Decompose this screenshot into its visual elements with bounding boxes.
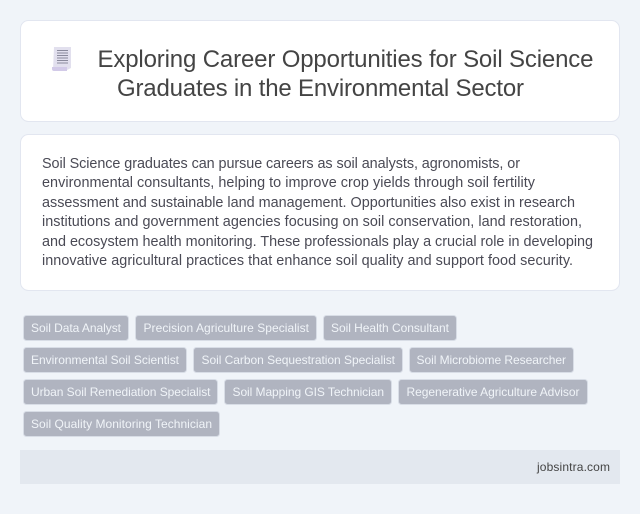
tag: Soil Health Consultant: Soil Health Consultant: [331, 321, 450, 335]
footer source text: jobsintra.com: [536, 460, 610, 474]
tag: Soil Quality Monitoring Technician: [24, 412, 220, 436]
tag: Urban Soil Remediation Specialist: [24, 380, 218, 404]
tag: Precision Agriculture Specialist: [136, 316, 316, 340]
tag: Soil Health Consultant: [324, 316, 456, 340]
tag: Soil Mapping GIS Technician: [224, 380, 392, 404]
tag: Soil Carbon Sequestration Specialist: Soil Carbon Sequestration Specialist: [202, 353, 396, 367]
tag: Soil Microbiome Researcher: [410, 348, 574, 372]
tag: Regenerative Agriculture Advisor: [398, 380, 588, 404]
heading: [98, 46, 594, 102]
tag: Environmental Soil Scientist: Environmental Soil Scientist: [31, 353, 180, 367]
tag: Precision Agriculture Specialist: Precision Agriculture Specialist: [144, 321, 310, 335]
tag: Soil Data Analyst: Soil Data Analyst: [31, 321, 122, 335]
text block: description: innovative agricultural practices that enhance soil quality and support food security.: [42, 253, 573, 269]
tag: Soil Data Analyst: [24, 316, 128, 340]
tag: Soil Mapping GIS Technician: Soil Mapping GIS Technician: [232, 385, 384, 399]
panel: description card: [20, 134, 620, 290]
tag: Soil Quality Monitoring Technician: Soil Quality Monitoring Technician: [31, 417, 212, 431]
tag list: [24, 316, 588, 436]
tag: Soil Microbiome Researcher: Soil Microbiome Researcher: [416, 353, 566, 367]
text block: description: environmental consultants, helping to improve crop yields through soil fertility: [42, 175, 536, 191]
tag: Environmental Soil Scientist: [24, 348, 186, 372]
text block: description: [42, 156, 593, 269]
text block: description: Soil Science graduates can pursue careers as soil analysts, agronomists, or: [42, 156, 520, 172]
text block: description: assessment and sustainable land management. Opportunities also exist in research: [42, 195, 575, 211]
tag: Regenerative Agriculture Advisor: Regenerative Agriculture Advisor: [406, 385, 580, 399]
text block: description: institutions and government agencies focusing on soil conservation, land restoration,: [42, 214, 582, 230]
panel: title card: [20, 20, 620, 122]
tag: Soil Carbon Sequestration Specialist: [194, 348, 402, 372]
heading: Graduates in the Environmental Sector: [117, 75, 524, 102]
text block: description: and ecosystem health monitoring. These professionals play a crucial role in developing: [42, 234, 593, 250]
heading: Exploring Career Opportunities for Soil Science: [98, 46, 594, 73]
tag: Urban Soil Remediation Specialist: Urban Soil Remediation Specialist: [31, 385, 211, 399]
footer bar: [20, 450, 620, 484]
icon: document scroll: [52, 47, 71, 71]
